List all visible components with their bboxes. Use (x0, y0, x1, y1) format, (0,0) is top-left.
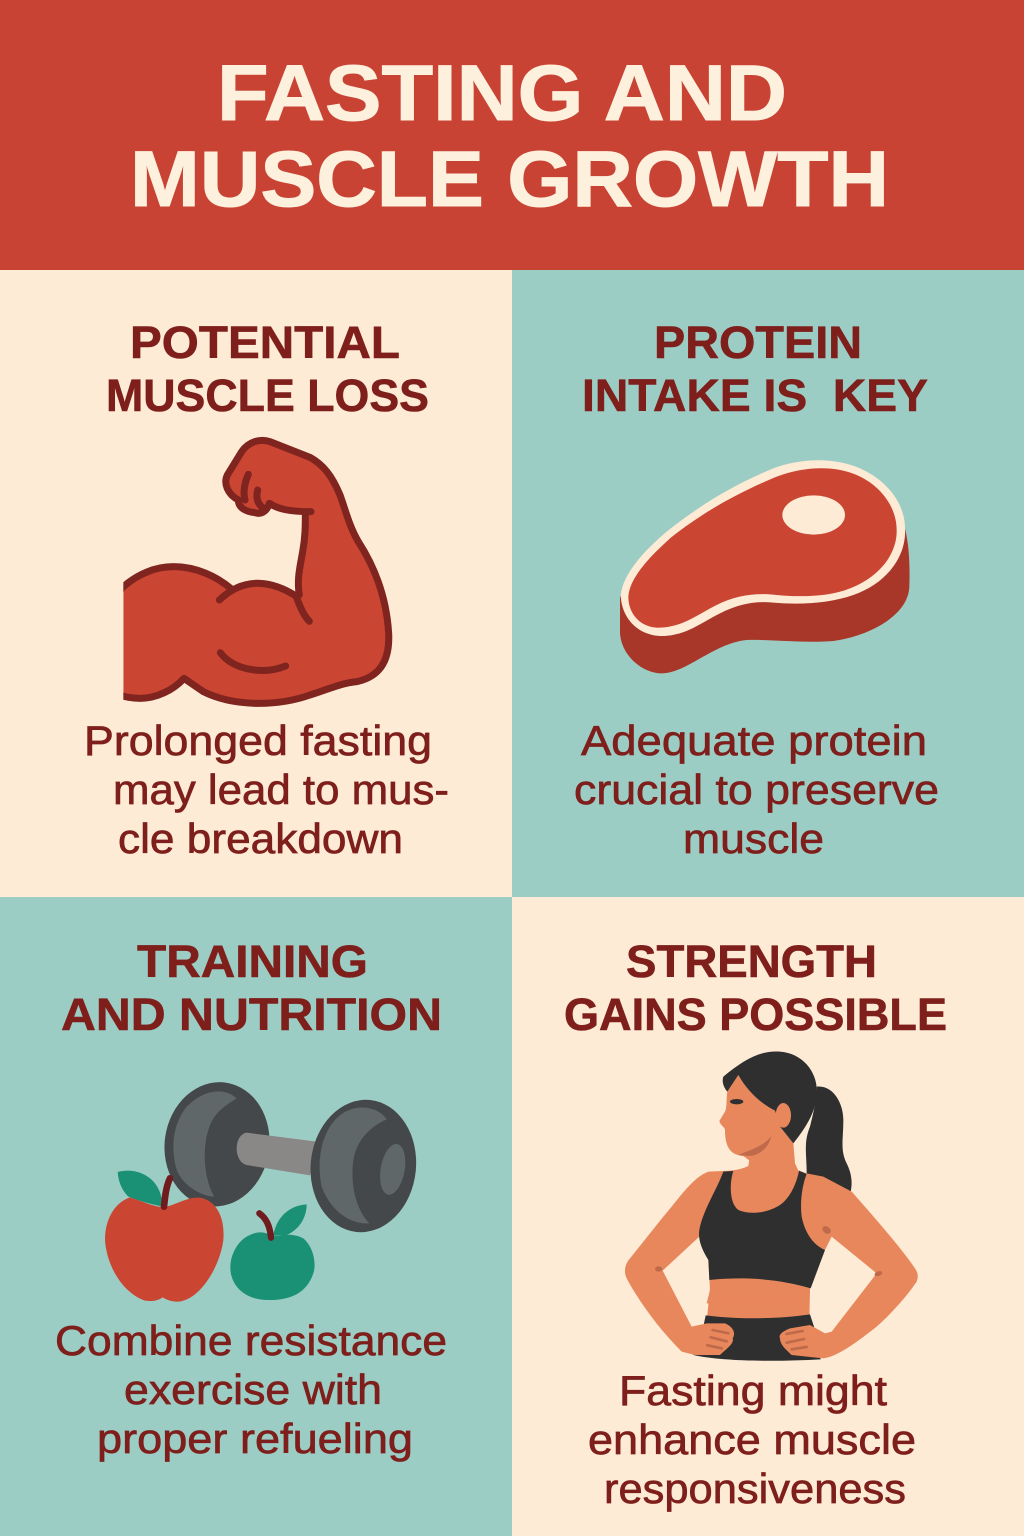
panel: potential muscle loss (87, 326, 448, 854)
text: adequate protein: muscle (683, 815, 824, 862)
icon: steak (620, 460, 910, 673)
heading: training and nutrition (61, 936, 442, 1040)
title: FASTING AND (217, 48, 787, 137)
heading: strength gains possible: STRENGTH (626, 936, 877, 987)
text: adequate protein: Adequate protein (581, 717, 927, 764)
text: adequate protein: crucial to preserve (574, 766, 939, 813)
text: fasting might: Fasting might (619, 1367, 887, 1414)
text: combine resistance: Combine resistance (55, 1317, 447, 1364)
dumbbell (157, 1075, 423, 1237)
icon: woman in sportswear (625, 1051, 918, 1361)
heading: potential muscle loss: MUSCLE LOSS (106, 370, 429, 421)
text: fasting might: enhance muscle (588, 1416, 916, 1463)
text: prolonged fasting: may lead to mus- (113, 766, 449, 813)
panel: training and nutrition (0, 897, 512, 1536)
text: prolonged fasting: Prolonged fasting (84, 717, 432, 764)
text: combine resistance: exercise with (124, 1366, 382, 1413)
text: combine resistance (55, 1317, 447, 1462)
title (130, 48, 889, 223)
text: fasting might (588, 1367, 916, 1512)
text: prolonged fasting (84, 717, 449, 862)
text: fasting might: responsiveness (604, 1465, 906, 1512)
heading: potential muscle loss: POTENTIAL (130, 317, 400, 368)
icon: dumbbell and apples (105, 1075, 423, 1302)
text: adequate protein (574, 717, 939, 862)
heading: potential muscle loss (106, 317, 429, 421)
heading: strength gains possible: GAINS POSSIBLE (564, 989, 947, 1040)
heading: training and nutrition: TRAINING (137, 936, 368, 987)
header banner (0, 0, 1024, 270)
red apple (105, 1171, 224, 1302)
heading: strength gains possible (564, 936, 947, 1040)
title: MUSCLE GROWTH (130, 134, 889, 223)
heading: protein intake is key: INTAKE IS KEY (582, 370, 928, 421)
heading: protein intake is key: PROTEIN (654, 317, 862, 368)
text: prolonged fasting: cle breakdown (118, 815, 403, 862)
panel: protein intake is key (512, 270, 1024, 897)
text: combine resistance: proper refueling (97, 1415, 413, 1462)
panel: strength gains possible (512, 897, 1024, 1536)
heading: training and nutrition: AND NUTRITION (61, 989, 442, 1040)
icon: flexed arm (120, 440, 389, 703)
green apple (230, 1204, 315, 1300)
heading: protein intake is key (582, 317, 928, 421)
